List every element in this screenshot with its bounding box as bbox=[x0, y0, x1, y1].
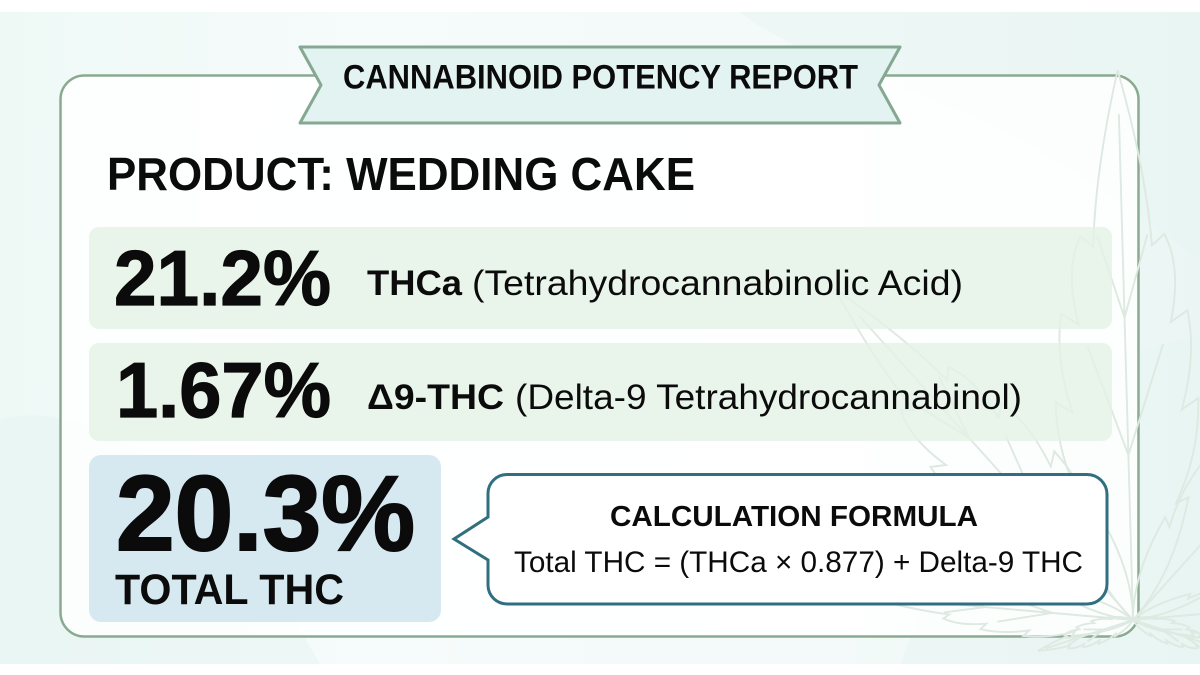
total THC label: TOTAL THC bbox=[115, 566, 344, 614]
formula text: Total THC = (THCa × 0.877) + Delta-9 THC bbox=[514, 546, 1083, 579]
THCa label: (Tetrahydrocannabinolic Acid) bbox=[472, 264, 963, 303]
delta-9 value: 1.67% bbox=[116, 346, 331, 434]
THCa label: THCa bbox=[367, 264, 463, 303]
THCa value: 21.2% bbox=[114, 234, 331, 322]
delta-9 label: Δ9-THC bbox=[367, 378, 504, 417]
title banner bbox=[300, 47, 900, 123]
callout: calculation formula bbox=[454, 474, 1107, 604]
icon: cannabis leaf watermark bbox=[857, 70, 1200, 652]
delta-9 label: (Delta-9 Tetrahydrocannabinol) bbox=[515, 378, 1022, 417]
total THC value: 20.3% bbox=[116, 453, 415, 573]
panel: delta-9 THC row bbox=[89, 343, 1112, 441]
panel: total THC bbox=[89, 453, 441, 622]
heading: product name: PRODUCT: WEDDING CAKE bbox=[107, 148, 695, 200]
title banner: CANNABINOID POTENCY REPORT bbox=[343, 58, 858, 96]
main report panel bbox=[60, 76, 1138, 636]
panel: THCa row bbox=[89, 227, 1112, 329]
formula heading: CALCULATION FORMULA bbox=[610, 501, 978, 533]
